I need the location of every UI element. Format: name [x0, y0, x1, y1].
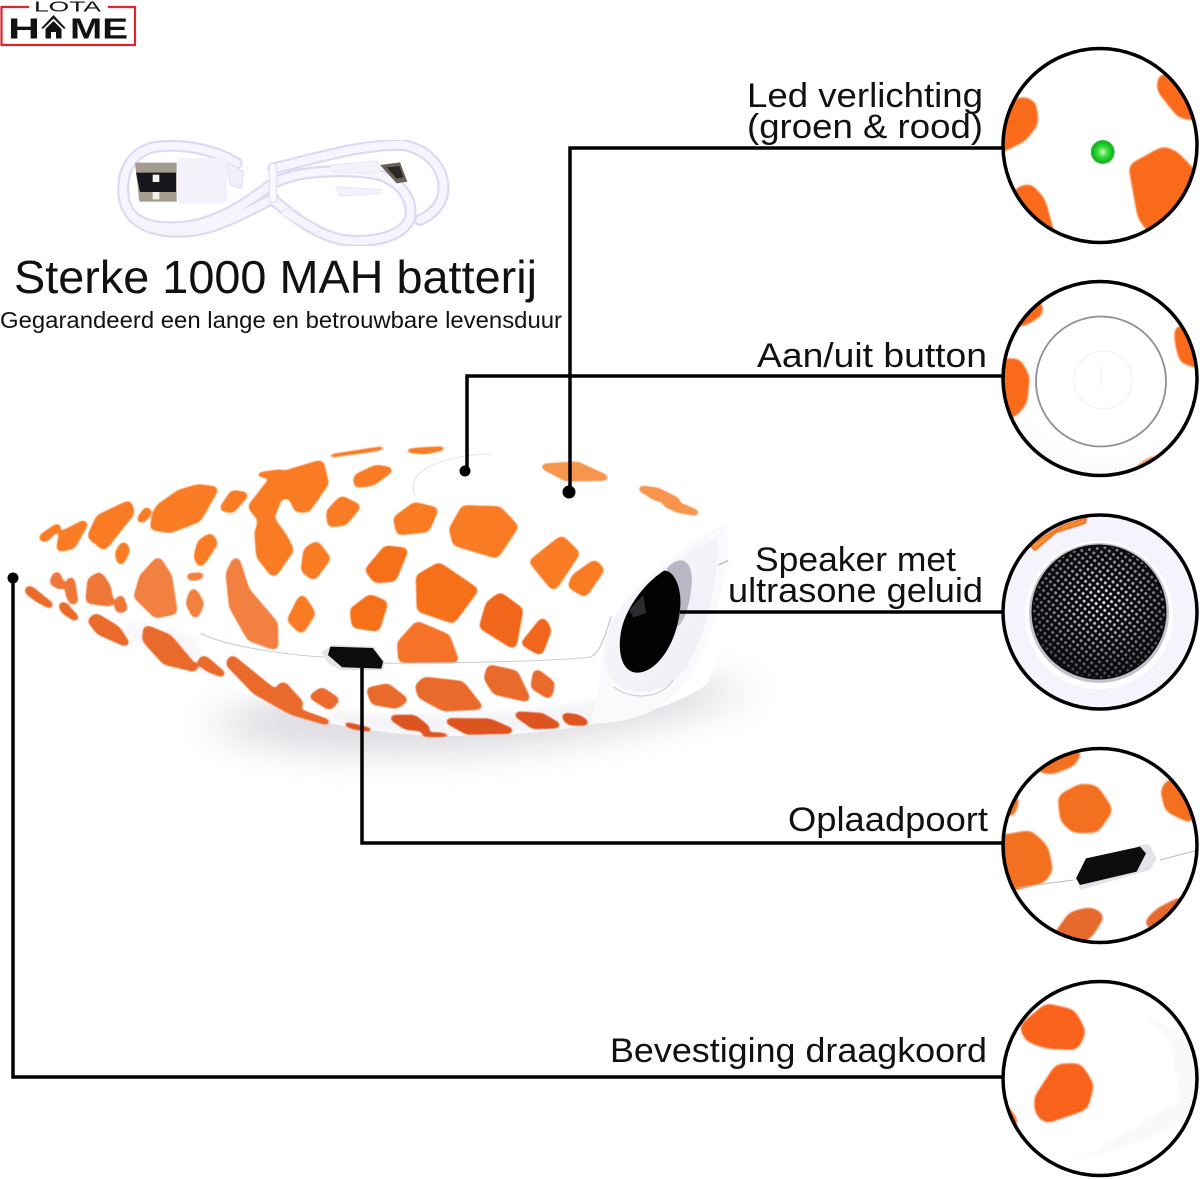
heading: battery: Sterke 1000 MAH batterij — [14, 251, 537, 303]
label: LED lighting: (groen & rood) — [747, 108, 983, 146]
label: charging port: Oplaadpoort — [788, 801, 988, 839]
product: shell-shaped ultrasonic device — [12, 448, 760, 754]
shell body — [12, 448, 740, 736]
callout line: speaker — [680, 610, 1003, 614]
USB charging cable — [123, 145, 443, 241]
detail circle: charging port — [990, 748, 1200, 947]
logo: Lota Home: H — [8, 14, 40, 46]
label: speaker: Speaker met — [755, 541, 956, 579]
label: lanyard attachment: Bevestiging draagkoord — [610, 1032, 987, 1070]
logo: Lota Home: ME — [70, 14, 128, 46]
port opening — [1077, 844, 1157, 890]
label: speaker — [728, 541, 983, 610]
USB-A plug — [135, 163, 177, 202]
button outline on shell — [413, 454, 491, 495]
label: LED lighting — [747, 77, 983, 146]
subtitle: battery: Gegarandeerd een lange en betrouwbare levensduur — [0, 307, 562, 333]
power button ring — [1036, 316, 1166, 446]
LED dot — [1091, 140, 1115, 164]
callout line: lanyard — [8, 572, 1003, 1077]
speaker mesh — [1025, 541, 1173, 689]
charging port — [322, 645, 385, 671]
speaker opening — [667, 560, 692, 627]
shell spots — [28, 448, 696, 735]
callout line: LED — [562, 148, 1003, 498]
label: speaker: ultrasone geluid — [728, 572, 983, 610]
micro-USB plug — [380, 162, 407, 183]
detail circle: LED — [990, 48, 1200, 242]
detail circle: lanyard attachment — [1000, 982, 1200, 1176]
upper spots — [42, 448, 696, 660]
logo: Lota Home — [2, 0, 135, 46]
lower spots — [28, 589, 585, 735]
seam line — [201, 617, 611, 663]
label: LED lighting: Led verlichting — [747, 77, 983, 115]
ground shadow — [200, 670, 760, 754]
label: on/off button: Aan/uit button — [757, 337, 987, 375]
detail circle: speaker — [1003, 515, 1197, 709]
callout line: on/off button — [460, 376, 1003, 476]
detail circle: on/off button — [1001, 280, 1199, 478]
callout line: charging port — [362, 668, 1003, 843]
speaker end of device — [590, 525, 728, 723]
